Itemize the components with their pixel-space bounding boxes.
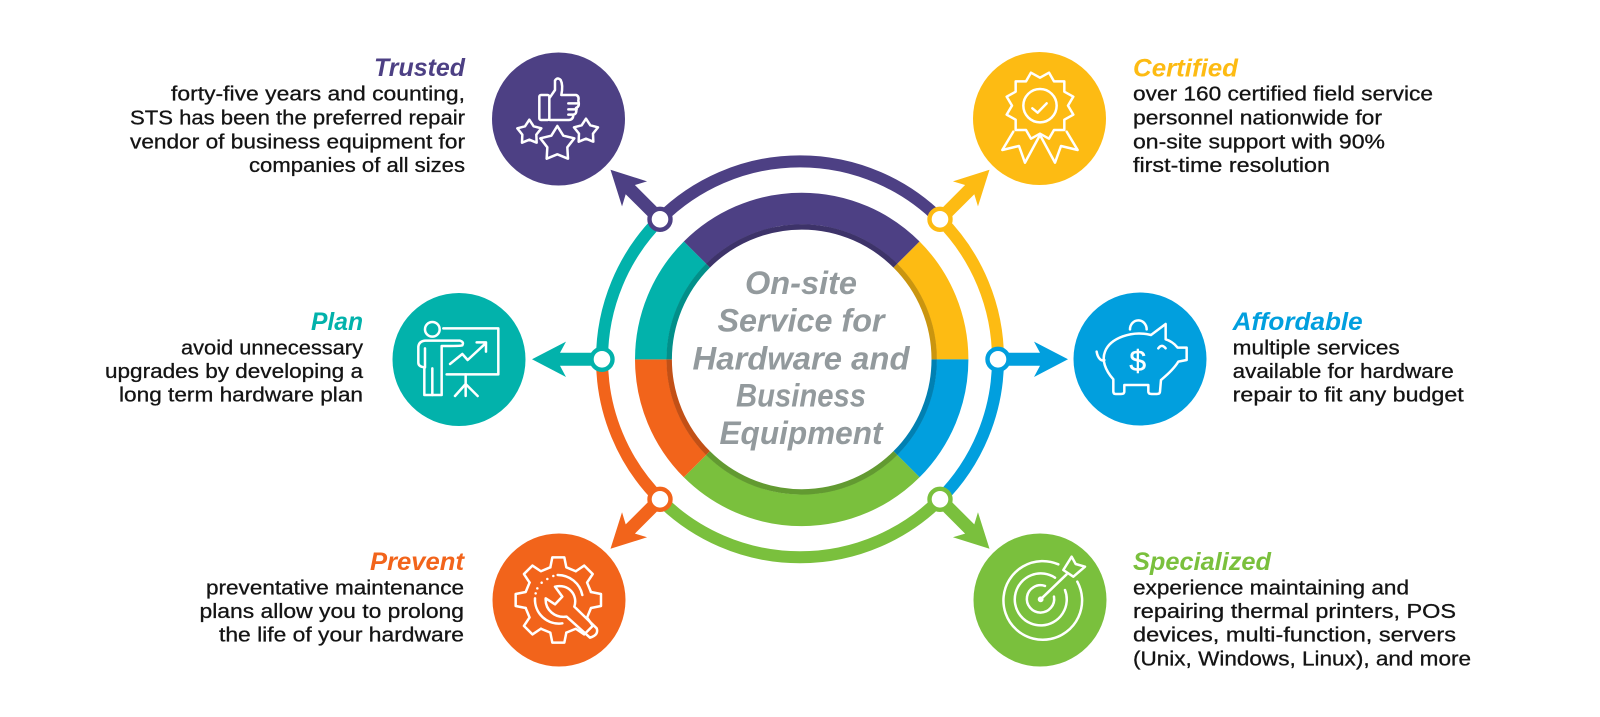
icon: affordable piggy bank: $ bbox=[1129, 345, 1146, 378]
text: specialized description: devices, multi-function, servers bbox=[1133, 625, 1456, 647]
arrow: prevent bbox=[598, 487, 673, 561]
panel: prevent bbox=[200, 534, 626, 666]
arrow: trusted bbox=[598, 157, 673, 232]
central segmented ring bbox=[651, 209, 953, 510]
text: trusted description: vendor of business equipment for bbox=[130, 131, 465, 153]
center title: Business bbox=[736, 378, 866, 414]
text: plan description bbox=[105, 337, 364, 407]
text: specialized description bbox=[1133, 577, 1471, 670]
heading: certified: Certified bbox=[1133, 54, 1239, 82]
text: plan description: long term hardware plan bbox=[119, 385, 363, 407]
heading: prevent: Prevent bbox=[370, 548, 466, 576]
text: specialized description: (Unix, Windows, Linux), and more bbox=[1133, 648, 1471, 670]
text: trusted description: STS has been the preferred repair bbox=[130, 108, 465, 130]
panel: certified bbox=[973, 52, 1433, 185]
text: certified description bbox=[1133, 84, 1433, 177]
text: certified description: over 160 certified field service bbox=[1133, 84, 1433, 106]
text: specialized description: repairing thermal printers, POS bbox=[1133, 601, 1456, 623]
heading: trusted: Trusted bbox=[374, 54, 466, 82]
arrow: certified bbox=[927, 157, 1002, 232]
text: affordable description: repair to fit any budget bbox=[1233, 385, 1464, 407]
text: trusted description bbox=[130, 84, 465, 177]
arrow: specialized bbox=[927, 487, 1002, 561]
icon: trusted thumbs up and stars bbox=[492, 52, 625, 186]
center title: On-site bbox=[745, 265, 857, 301]
panel: affordable bbox=[1074, 292, 1464, 426]
text: certified description: personnel nationwide for bbox=[1133, 108, 1382, 130]
text: affordable description: available for hardware bbox=[1233, 361, 1454, 383]
center title: Service for bbox=[718, 303, 886, 339]
text: trusted description: forty-five years and counting, bbox=[171, 84, 465, 106]
arrow: affordable bbox=[998, 342, 1068, 377]
text: plan description: upgrades by developing a bbox=[105, 361, 364, 383]
center title bbox=[692, 265, 911, 451]
outer ring arcs bbox=[602, 161, 998, 557]
text: prevent description: preventative maintenance bbox=[206, 577, 464, 599]
icon: plan presenter with chart bbox=[392, 293, 526, 426]
text: trusted description: companies of all sizes bbox=[249, 155, 465, 177]
heading: plan: Plan bbox=[311, 308, 363, 336]
text: specialized description: experience maintaining and bbox=[1133, 577, 1409, 599]
heading: affordable: Affordable bbox=[1232, 308, 1363, 336]
icon: specialized target and arrow bbox=[974, 534, 1106, 666]
panel: trusted bbox=[130, 52, 625, 186]
center title: Equipment bbox=[720, 415, 884, 451]
ring hubs bbox=[592, 209, 1008, 510]
heading: specialized: Specialized bbox=[1133, 548, 1272, 576]
panel: plan bbox=[105, 293, 526, 426]
text: affordable description bbox=[1233, 337, 1464, 407]
icon: affordable piggy bank bbox=[1074, 292, 1206, 426]
text: certified description: first-time resolution bbox=[1133, 155, 1330, 177]
text: plan description: avoid unnecessary bbox=[181, 337, 363, 359]
text: prevent description: plans allow you to prolong bbox=[200, 601, 464, 623]
panel: specialized bbox=[974, 534, 1471, 670]
center title: Hardware and bbox=[692, 340, 911, 376]
arrow: plan bbox=[532, 342, 602, 377]
icon: certified award rosette bbox=[973, 52, 1106, 185]
text: prevent description: the life of your hardware bbox=[219, 625, 464, 647]
text: prevent description bbox=[200, 577, 464, 647]
icon: prevent gear and wrench bbox=[492, 534, 626, 666]
text: certified description: on-site support with 90% bbox=[1133, 131, 1385, 153]
text: affordable description: multiple services bbox=[1233, 337, 1400, 359]
